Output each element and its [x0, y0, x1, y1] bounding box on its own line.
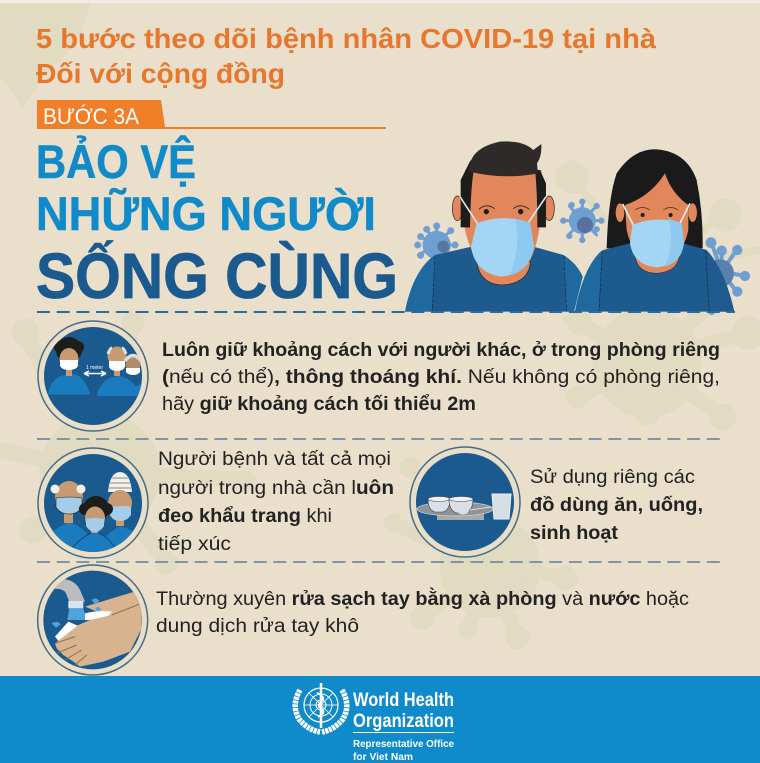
- step tag: BƯỚC 3A: [37, 100, 386, 129]
- title: Đối với cộng đồng: [36, 58, 285, 89]
- dashed dividers: [37, 312, 735, 562]
- main heading: BẢO VỆ: [36, 135, 196, 188]
- main heading: [36, 135, 398, 312]
- text: everyone wears a mask: Người bệnh và tất cả mọi: [158, 449, 391, 470]
- text: personal dishes: sinh hoạt: [530, 523, 619, 544]
- man: [405, 141, 583, 312]
- text: everyone wears a mask: người trong nhà cần l uôn: [158, 478, 394, 499]
- WHO wordmark: Representative Office: [353, 738, 454, 750]
- WHO wordmark: Organization: [353, 711, 454, 732]
- text: everyone wears a mask: đeo khẩu trang khi: [158, 506, 332, 527]
- text: personal dishes: Sử dụng riêng các: [530, 467, 695, 488]
- woman: [575, 149, 734, 312]
- icon: WHO emblem: [295, 683, 347, 732]
- text: wash hands: dung dịch rửa tay khô: [156, 616, 359, 637]
- icon: washing hands: [38, 565, 148, 675]
- title: [36, 23, 656, 89]
- text: keep distance advice: hãy giữ khoảng cách tối thiểu 2m: [162, 394, 476, 415]
- icon: virus right: [706, 237, 750, 315]
- icon: virus left: [414, 223, 458, 259]
- icon: personal dishes: [410, 447, 520, 557]
- text: wash hands: [156, 588, 689, 637]
- main heading: SỐNG CÙNG: [36, 240, 398, 312]
- text: personal dishes: [530, 467, 703, 544]
- WHO wordmark: for Viet Nam: [353, 751, 413, 763]
- text: keep distance advice: (nếu có thể) , thông thoáng khí. Nếu không có phòng riêng,: [162, 367, 720, 388]
- illustration: man and woman wearing masks with viruses: [405, 141, 750, 315]
- icon: virus centre: [560, 199, 604, 243]
- main heading: NHỮNG NGƯỜI: [36, 187, 376, 240]
- text: keep distance advice: Luôn giữ khoảng cách với người khác, ở trong phòng riêng: [162, 340, 720, 361]
- text: everyone wears a mask: tiếp xúc: [158, 534, 231, 555]
- footer band: [0, 676, 760, 763]
- WHO wordmark: World Health: [353, 690, 454, 711]
- step tag: BƯỚC 3A: BƯỚC 3A: [43, 104, 139, 129]
- WHO wordmark: [353, 690, 454, 763]
- icon: three people wearing masks: [38, 448, 148, 558]
- text: keep distance advice: [162, 340, 720, 415]
- text: personal dishes: đồ dùng ăn, uống,: [530, 495, 703, 516]
- text: wash hands: Thường xuyên rửa sạch tay bằng xà phòng và nước hoặc: [156, 588, 689, 610]
- icon: keep 1 meter distance: [38, 321, 148, 431]
- text: everyone wears a mask: [158, 449, 394, 555]
- icon: keep 1 meter distance: 1 meter: [86, 365, 103, 371]
- title: 5 bước theo dõi bệnh nhân COVID-19 tại nhà: [36, 23, 656, 54]
